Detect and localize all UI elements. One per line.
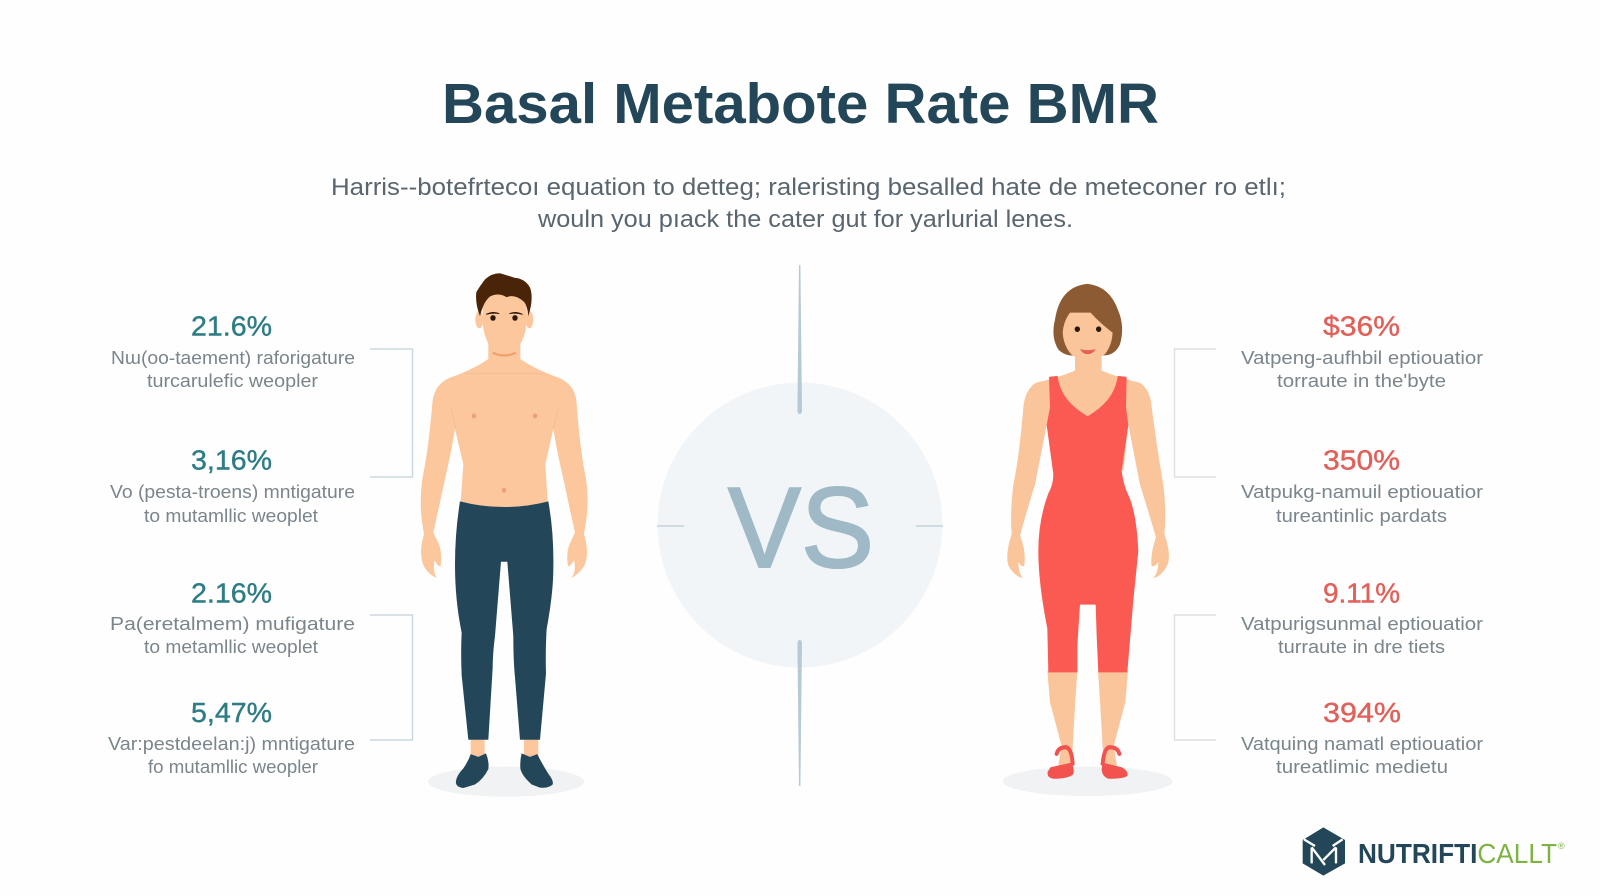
stat: male 3,16% <box>110 445 355 526</box>
dress <box>1038 376 1138 672</box>
nipples and navel <box>472 413 537 493</box>
fringe <box>1058 288 1122 355</box>
stat: female 394%: Vatquing namatl eptiouatior <box>1241 733 1483 754</box>
stat: male 21.6%: turcarulefic weopler <box>147 370 318 391</box>
shoes <box>456 753 553 788</box>
stat: female 394% <box>1241 697 1483 777</box>
subtitle: wouln you pıack the cater gut for yarlurial lenes. <box>537 206 1073 233</box>
lips <box>1080 349 1096 354</box>
stat: male 21.6%: Nɯ(oo-taement) raforigature <box>111 347 355 368</box>
illustration: woman <box>1003 284 1173 796</box>
stat: female 350%: 350% <box>1323 445 1400 476</box>
stat: female 9.11%: 9.11% <box>1323 578 1400 609</box>
circle <box>658 382 942 668</box>
subtitle <box>331 174 1286 233</box>
stat: female 350%: Vatpukg-namuil eptiouatior <box>1241 481 1483 502</box>
skin: neck, shoulders, arms <box>1007 351 1169 578</box>
skin: body and arms <box>421 336 588 578</box>
shoes <box>1048 763 1128 779</box>
stat: female $36% <box>1241 311 1483 391</box>
bracket: male upper <box>370 349 412 477</box>
stat: female 9.11%: turraute in dre tiets <box>1278 636 1445 657</box>
hair <box>476 273 532 316</box>
stat: male 3,16%: 3,16% <box>191 445 272 476</box>
ankles <box>471 738 538 759</box>
stat: male 2.16%: to metamllic weoplet <box>144 636 318 657</box>
VS label: VS <box>728 465 874 592</box>
stat: female 394%: tureatlimic medietu <box>1276 756 1448 777</box>
stat: female $36%: torraute in the'byte <box>1277 370 1446 391</box>
stat: female $36%: Vatpeng-aufhbil eptiouatior <box>1241 347 1483 368</box>
stat: male 2.16%: Pa(eretalmem) mufigature <box>110 613 355 634</box>
stat: female 394%: 394% <box>1323 697 1401 728</box>
stat: male 5,47%: Var:pestdeelan:j) mntigature <box>108 733 355 754</box>
ground shadow <box>428 767 584 797</box>
ground shadow <box>1003 766 1173 796</box>
eyes and brows <box>486 312 523 321</box>
eyes <box>1075 326 1101 332</box>
bracket: female lower <box>1174 615 1216 740</box>
top spindle <box>797 265 802 414</box>
pants <box>455 501 553 740</box>
title: Basal Metabote Rate BMR <box>442 72 1159 136</box>
head <box>475 311 483 328</box>
panel: female statistics <box>1241 311 1483 777</box>
chest lines <box>451 373 559 429</box>
stat: male 21.6% <box>111 311 355 391</box>
stat: male 2.16%: 2.16% <box>191 578 272 609</box>
stat: male 3,16%: Vo (pesta-troens) mntigature <box>110 481 355 502</box>
panel: male statistics <box>108 311 355 777</box>
ticks <box>657 525 943 527</box>
stat: male 2.16% <box>110 578 355 657</box>
face <box>1063 313 1113 361</box>
stat: female 9.11%: Vatpurigsunmal eptiouatior <box>1241 613 1483 634</box>
stat: female 9.11% <box>1241 578 1483 657</box>
stat: female 350% <box>1241 445 1483 526</box>
logo: Nutrifticalt <box>1303 827 1565 876</box>
bracket: female upper <box>1174 349 1216 477</box>
hair back <box>1053 284 1122 356</box>
legs <box>1047 671 1128 765</box>
centre: VS badge <box>657 265 943 786</box>
stat: female $36%: $36% <box>1323 311 1400 342</box>
subtitle: Harris--botefrtecoı equation to detteg; raleristing besalled hate de meteconeɾ ro etlı; <box>331 174 1286 201</box>
bracket: male lower <box>370 615 412 740</box>
bottom spindle <box>797 640 802 786</box>
registered mark: ® <box>1558 841 1565 851</box>
shoe straps <box>1057 747 1119 764</box>
stat: male 21.6%: 21.6% <box>191 311 272 342</box>
icon: hexagon mark <box>1303 827 1345 876</box>
stat: male 3,16%: to mutamllic weoplet <box>144 505 318 526</box>
stat: male 5,47%: 5,47% <box>191 697 272 728</box>
illustration: man <box>421 273 588 797</box>
stat: female 350%: tureantinlic pardats <box>1276 505 1447 526</box>
chin shadow <box>493 353 516 355</box>
wordmark: NUTRIFTICALLT <box>1358 838 1557 869</box>
stat: male 5,47% <box>108 697 355 777</box>
stat: male 5,47%: fo mutamllic weopler <box>148 756 318 777</box>
